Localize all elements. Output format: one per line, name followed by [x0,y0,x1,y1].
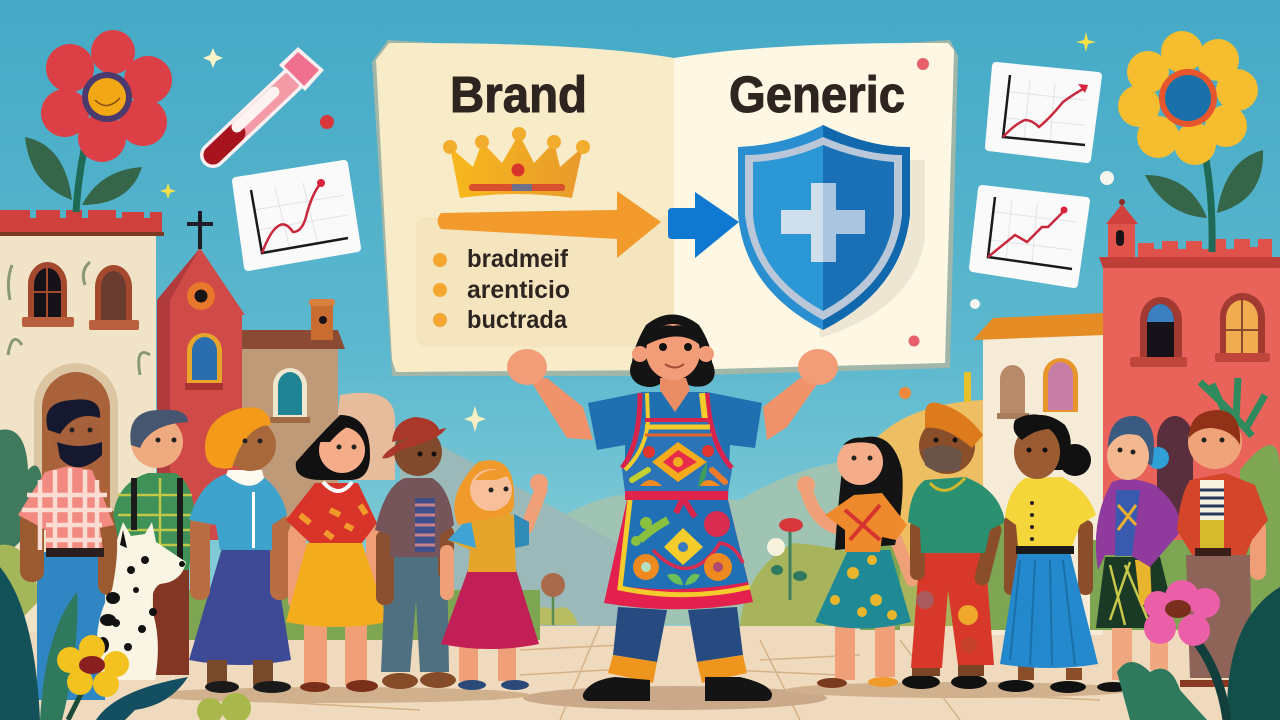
foreground plants left [0,567,251,720]
person: man in green shirt [902,402,1005,689]
background hills [330,372,1000,640]
ground pavement [0,625,1280,720]
right page [674,43,954,370]
icon: yellow flower [1118,31,1263,252]
person: man in red jacket [1177,410,1268,687]
heading: Generic: Generic [729,66,905,123]
dog: dalmatian [97,522,186,680]
bullet list: bradmeif [467,245,569,273]
person: girl in teal skirt [797,437,912,688]
building: stone house [242,299,345,538]
person: girl with orange hair [440,460,548,690]
shirt [588,392,762,500]
hands [507,349,838,385]
person: plaid shirt man [18,399,118,700]
heading: Brand: Brand [450,66,587,123]
bullet list: arenticio [467,276,570,304]
bullet list [433,245,570,334]
small garden flowers [541,518,807,625]
decorative accents [160,32,1114,432]
person: woman in yellow [998,414,1098,693]
person: red dress woman [286,415,388,692]
person: blue shirt woman [189,407,291,693]
person: green striped man [113,410,195,675]
trouser cuffs [608,655,747,683]
icon: pink flower [1144,580,1220,646]
page shadow panel [416,217,674,347]
chart card: lower right [973,189,1086,284]
chart card: top right [989,66,1098,159]
left page [376,43,674,372]
arrow: blue [668,192,739,258]
icon: yellow foreground flower [57,635,129,720]
icon: red flower [25,30,172,212]
book cover edge [372,40,958,376]
bushes behind the crowd [0,378,1280,640]
person: boy with hat [375,417,456,689]
arrow: orange [438,191,661,258]
shoes [583,677,772,701]
dot accents [908,58,929,346]
bullet list: buctrada [467,306,568,334]
building: red church [157,211,245,540]
building: left cream tower [0,210,164,632]
person: central figure holding book [507,314,838,701]
foreground plants right [1117,587,1280,720]
open book [372,40,958,376]
building: right red fort [1099,199,1280,605]
apron [604,393,753,609]
icon: shield [738,125,925,338]
icon: test tube [213,47,324,155]
head and hair [630,314,715,387]
chart card: left [236,164,357,267]
person: woman in purple [1096,416,1182,692]
legs [613,607,743,662]
icon: crown [443,127,590,198]
building: right cream house [973,313,1104,635]
arms [530,378,820,440]
